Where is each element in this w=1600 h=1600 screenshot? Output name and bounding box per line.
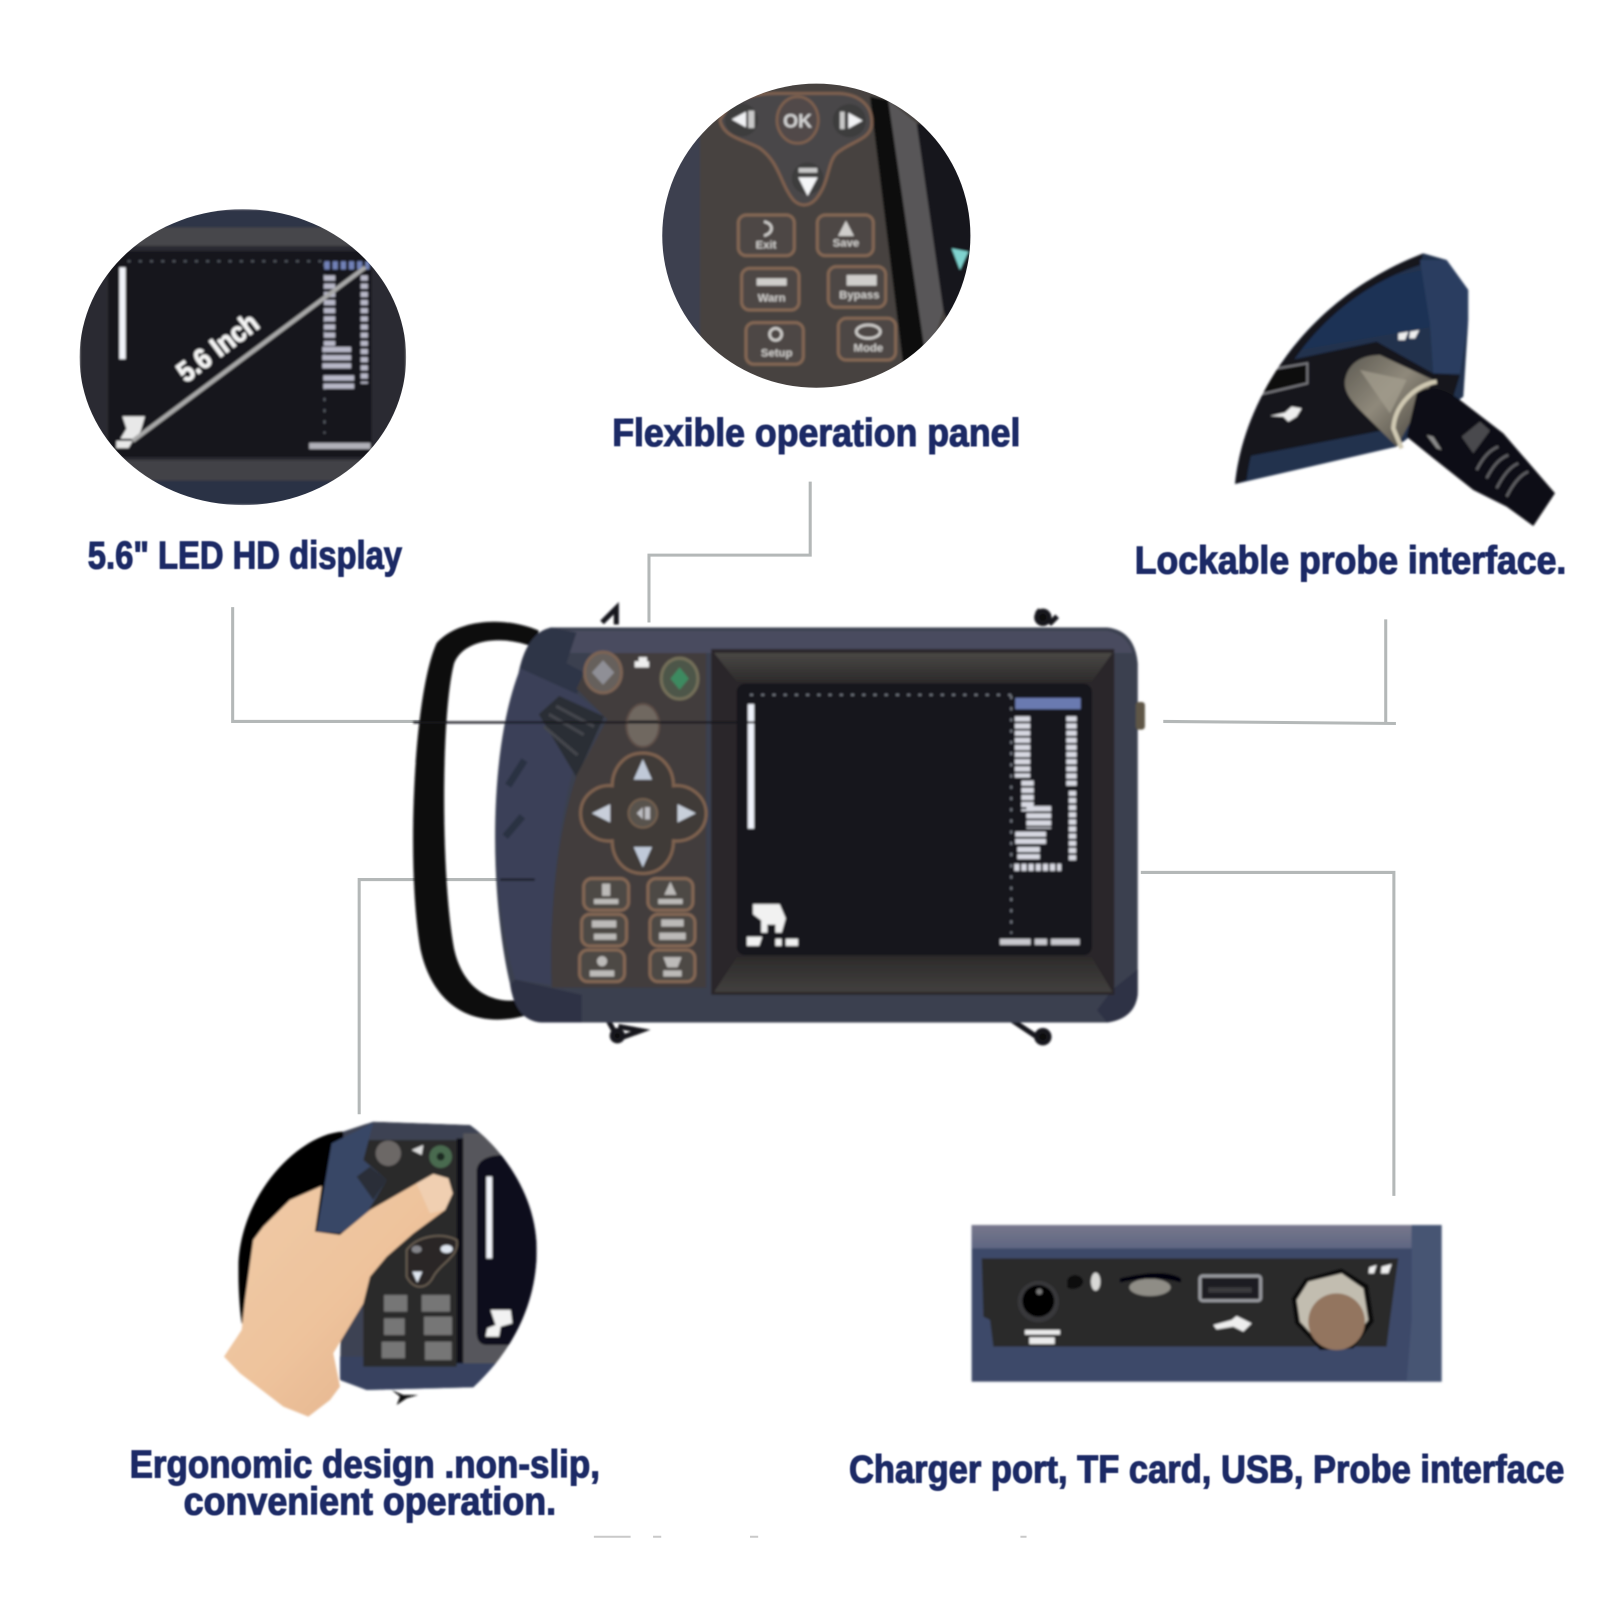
pad shape: [720, 93, 872, 205]
device body in hand: [338, 1120, 482, 1392]
carry handle strap: [413, 622, 539, 1020]
label: Ergonomic design: Ergonomic design .non-slip,: [130, 1444, 600, 1487]
screen scale dots: [750, 695, 1012, 934]
down key: [792, 162, 824, 196]
function buttons: [580, 879, 695, 982]
hand screen: [477, 1155, 540, 1345]
zoomed animal icon: [116, 416, 145, 448]
mode icon: [747, 937, 798, 946]
screen footer: [1000, 939, 1080, 945]
probe connector stub: [1136, 702, 1145, 730]
lower keys: [382, 1295, 452, 1360]
label: Ergonomic design: [130, 1444, 600, 1523]
image circle: operation panel close-up: [660, 80, 973, 393]
left key: [725, 103, 758, 137]
key glyphs and captions: [756, 221, 883, 360]
plug highlight: [1462, 422, 1490, 453]
housing dark rim: [1235, 253, 1423, 484]
cyan screen mark: [952, 248, 968, 270]
image: lockable probe connector: [1233, 250, 1555, 526]
left grip: [496, 668, 602, 985]
key glyphs and captions: Save: [833, 238, 859, 250]
usb symbol: [1213, 1316, 1252, 1332]
label: Ergonomic design: convenient operation.: [184, 1480, 556, 1523]
screen readouts: [1014, 716, 1072, 867]
connector line: ports to device: [1141, 872, 1394, 1196]
label: Flexible operation panel: Flexible operation panel: [612, 412, 1020, 455]
left body edge: [662, 137, 700, 334]
hand grip: [317, 1123, 387, 1233]
ok key: OK: [783, 111, 812, 132]
top buttons: [376, 1141, 452, 1168]
top lighter band: [972, 1225, 1412, 1248]
black port plate: [982, 1258, 1398, 1347]
lanyard loops: [602, 608, 1057, 1043]
dpad: [581, 753, 706, 873]
dpad visible: [407, 1236, 457, 1287]
speaker grille: [539, 696, 604, 778]
black port panel: [1238, 342, 1460, 458]
hand: [224, 1174, 453, 1417]
black plug body: [1407, 388, 1555, 526]
screen header: [1015, 698, 1081, 709]
housing corner: [1420, 260, 1468, 373]
zoomed readouts: [324, 265, 369, 392]
socket marks: [1369, 1264, 1392, 1273]
key glyphs and captions: Warn: [758, 293, 786, 305]
usb port: [1200, 1276, 1261, 1301]
hand depth bar: [484, 1174, 494, 1261]
charge jack: [1018, 1281, 1059, 1322]
grip grille: [357, 1167, 387, 1200]
label: Lockable probe interface: Lockable probe interface.: [1135, 539, 1566, 582]
connector line: display to device: [233, 607, 429, 721]
device body: [495, 628, 1138, 1022]
probe icon: [635, 657, 649, 667]
measure label: 5.6 Inch: [171, 307, 265, 389]
ok key: [777, 97, 818, 143]
key glyphs and captions: Bypass: [839, 289, 879, 301]
barrel highlight: [1360, 370, 1407, 413]
device: handheld ultrasound scanner: [413, 608, 1145, 1043]
screen: [737, 684, 1092, 955]
image circle: 5.6 inch display close-up: [80, 209, 406, 505]
plug grooves: [1477, 447, 1528, 497]
grip grooves: [505, 760, 524, 837]
hand panel: [363, 1140, 457, 1367]
depth bar: [748, 704, 754, 829]
image circle: hand holding device: [224, 1120, 540, 1417]
usb symbol: [1270, 407, 1302, 422]
function button glyphs: [590, 882, 686, 977]
zoomed screen footer: [309, 443, 370, 449]
panel marks: [1398, 330, 1419, 340]
plug glint: [1427, 435, 1442, 450]
bezel highlight top: [714, 653, 1112, 682]
housing: [1233, 250, 1473, 487]
label: LED HD display: 5.6" LED HD display: [88, 534, 402, 577]
bezel bands: [126, 210, 360, 504]
screen edge: [916, 123, 970, 318]
corner bumpers: [510, 969, 1138, 1022]
thumb tip shading: [417, 1174, 453, 1213]
housing top band: [1312, 282, 1367, 338]
key glyphs and captions: Setup: [761, 348, 792, 360]
key glyphs and captions: Mode: [854, 343, 883, 355]
charge label: [1025, 1330, 1060, 1344]
gain button: [627, 704, 659, 747]
grip top cap: [520, 628, 590, 694]
lock ring: [1393, 382, 1437, 448]
animal icon: [753, 904, 786, 933]
indicator icons: [1067, 1273, 1100, 1291]
power button: [585, 652, 621, 693]
tf card slot: [1120, 1273, 1181, 1296]
divider black strip: [870, 97, 927, 367]
diagonal measure line: [133, 267, 365, 441]
hand animal icon: [486, 1310, 512, 1337]
screen bezel: [711, 649, 1114, 995]
metal barrel: [1345, 355, 1433, 447]
usb port: [1258, 363, 1307, 395]
bezel strip: [888, 100, 943, 363]
device bottom band: [338, 1356, 494, 1392]
function keys: [738, 215, 896, 364]
connector line: operation panel to device: [649, 482, 810, 622]
hand bezel strip: [457, 1138, 463, 1363]
right key: [833, 104, 866, 137]
connector line: probe interface to device: [1163, 619, 1396, 723]
faint cropped marks at bottom: [594, 1536, 1027, 1538]
key glyphs and captions: Exit: [756, 239, 777, 251]
lanyard stub: [392, 1390, 418, 1405]
freeze button green: [661, 658, 698, 699]
zoomed depth bar: [119, 267, 125, 359]
panel base: [972, 1225, 1442, 1382]
body top band: [551, 631, 1133, 653]
image: rear ports panel: [972, 1225, 1442, 1382]
connector line: grip to device: [359, 880, 500, 1114]
line overlays on device: [413, 722, 801, 880]
zoomed screen: [108, 251, 371, 457]
bezel highlight bottom: [714, 957, 1112, 992]
control panel: [551, 653, 706, 988]
black backdrop crescent: [233, 1120, 367, 1333]
right column: [1407, 1225, 1442, 1382]
probe socket: [1292, 1268, 1374, 1350]
